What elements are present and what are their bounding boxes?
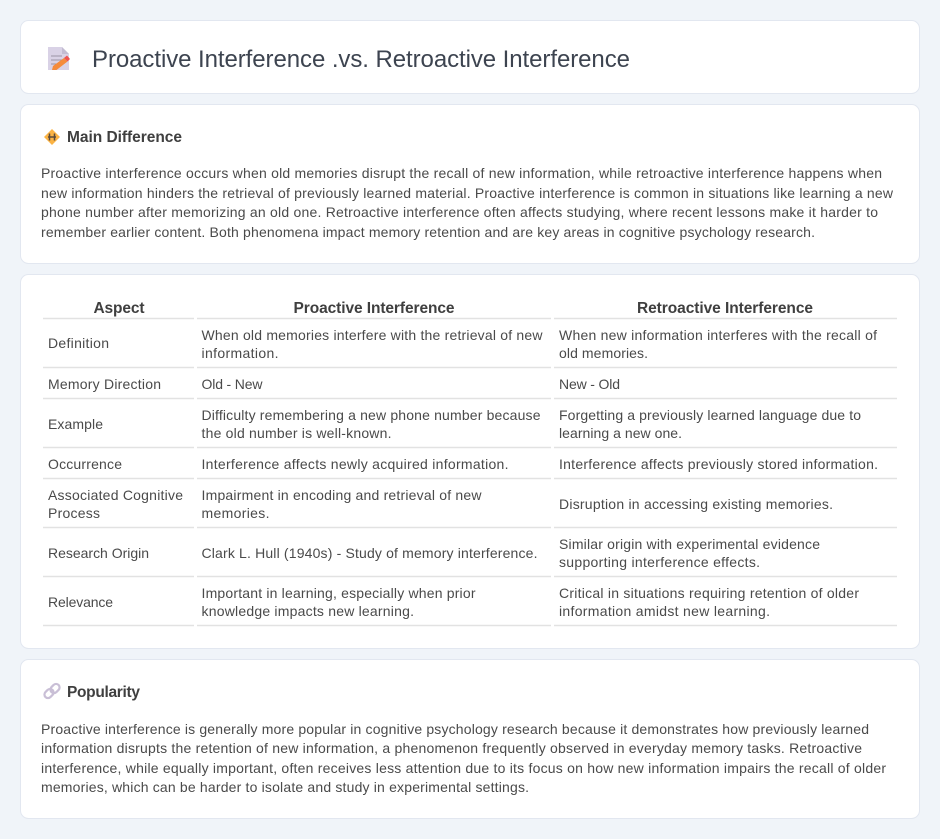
title: Proactive Interference .vs. Retroactive Interference bbox=[92, 46, 630, 73]
row: definition: old memories. bbox=[559, 345, 648, 361]
row: definition: When old memories interfere with the retrieval of new bbox=[202, 327, 543, 343]
table header: Retroactive Interference bbox=[637, 300, 813, 317]
row: associated cognitive process: Disruption in accessing existing memories. bbox=[559, 496, 833, 512]
text block: main difference: phone number after memorizing an old one. Retroactive interference often affects studying, where recent lessons make it harder to bbox=[41, 204, 878, 220]
row: research origin: Clark L. Hull (1940s) - Study of memory interference. bbox=[202, 545, 538, 561]
row: relevance: Important in learning, especially when prior bbox=[202, 585, 476, 601]
row: memory direction: Memory Direction bbox=[48, 376, 161, 392]
text block: main difference: Proactive interference occurs when old memories disrupt the recall of new information, while retroactive interference happens when bbox=[41, 165, 882, 181]
row: associated cognitive process: memories. bbox=[202, 505, 270, 521]
row: associated cognitive process: Process bbox=[48, 505, 100, 521]
row: memory direction: Old - New bbox=[202, 376, 263, 392]
row: relevance: Critical in situations requiring retention of older bbox=[559, 585, 859, 601]
text block: main difference: remember earlier content. Both phenomena impact memory retention and are key areas in cognitive psychology research. bbox=[41, 224, 815, 240]
row: relevance: knowledge impacts new learning. bbox=[202, 603, 414, 619]
text block: main difference bbox=[41, 165, 894, 240]
table header: Aspect bbox=[94, 300, 144, 317]
row: relevance: information amidst new learning. bbox=[559, 603, 770, 619]
table header: Proactive Interference bbox=[294, 300, 455, 317]
row: occurrence: Occurrence bbox=[48, 456, 122, 472]
row: example: the old number is well-known. bbox=[202, 425, 392, 441]
panel: title header bbox=[20, 20, 920, 94]
row: example bbox=[48, 407, 861, 441]
row: example: learning a new one. bbox=[559, 425, 682, 441]
row: research origin: Similar origin with experimental evidence bbox=[559, 536, 820, 552]
row: associated cognitive process: Impairment in encoding and retrieval of new bbox=[202, 487, 482, 503]
row: memory direction: New - Old bbox=[559, 376, 620, 392]
row: research origin bbox=[48, 536, 820, 570]
text block: main difference: new information hinders the retrieval of previously learned material. Proactive interference is common in situations like learning a new bbox=[41, 185, 894, 201]
row: associated cognitive process bbox=[48, 487, 833, 521]
icon: orange diamond sign bbox=[44, 129, 60, 145]
row: example: Forgetting a previously learned language due to bbox=[559, 407, 861, 423]
text block: popularity: memories, which can be harder to isolate and study in experimental settings. bbox=[41, 779, 529, 795]
icon: document with pencil bbox=[48, 47, 70, 70]
row: relevance: Relevance bbox=[48, 594, 113, 610]
text block: popularity: Proactive interference is generally more popular in cognitive psychology research because it demonstrates how previously learned bbox=[41, 721, 869, 737]
row: example: Difficulty remembering a new phone number because bbox=[202, 407, 541, 423]
row: occurrence: Interference affects newly acquired information. bbox=[202, 456, 508, 472]
row: memory direction bbox=[48, 376, 620, 392]
row: definition: When new information interferes with the recall of bbox=[559, 327, 877, 343]
row: occurrence: Interference affects previously stored information. bbox=[559, 456, 878, 472]
heading: popularity: Popularity bbox=[67, 684, 140, 701]
row: definition: information. bbox=[202, 345, 278, 361]
row: definition bbox=[48, 327, 877, 361]
text block: popularity: information disrupts the retention of new information, a phenomenon frequently observed in everyday memory tasks. Retroactive bbox=[41, 740, 862, 756]
text block: popularity bbox=[41, 721, 886, 795]
panel: comparison table bbox=[20, 274, 920, 648]
row: occurrence bbox=[48, 456, 878, 472]
row: research origin: supporting interference effects. bbox=[559, 554, 760, 570]
icon: chain link bbox=[43, 682, 61, 700]
text block: popularity: interference, while equally important, often receives less attention due to its focus on how new information impairs the recall of older bbox=[41, 760, 886, 776]
row: research origin: Research Origin bbox=[48, 545, 149, 561]
heading: main difference: Main Difference bbox=[67, 129, 182, 146]
panel: main difference bbox=[20, 104, 920, 264]
row: relevance bbox=[48, 585, 859, 619]
table header bbox=[94, 300, 813, 317]
row: associated cognitive process: Associated Cognitive bbox=[48, 487, 183, 503]
row: definition: Definition bbox=[48, 335, 109, 351]
panel: popularity bbox=[20, 660, 920, 818]
row: example: Example bbox=[48, 416, 103, 432]
